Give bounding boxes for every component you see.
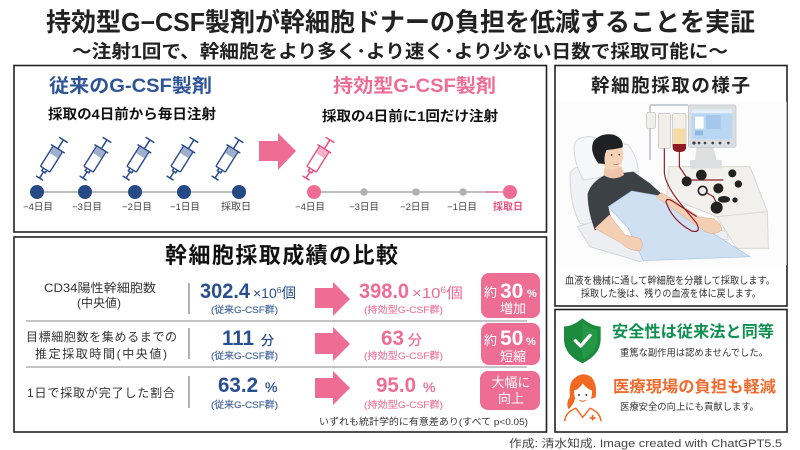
- row 2: collection time: 分: [408, 332, 422, 348]
- row 3: one-day completion rate: 95.0: [376, 374, 416, 397]
- icons: five blue syringes: [33, 136, 245, 182]
- arrow: conventional to long-acting: [259, 133, 296, 170]
- heading: workload: 医療現場の負担も軽減: [613, 377, 776, 396]
- row 2: collection time: (持効型G-CSF群): [364, 350, 443, 362]
- title: 持効型G−CSF製剤が幹細胞ドナーの負担を低減することを実証: [46, 8, 755, 37]
- panel: collection illustration: [555, 66, 787, 306]
- row 2: collection time: 63: [381, 327, 404, 350]
- row 2: collection time: (従来G-CSF群): [211, 350, 278, 362]
- torso: [588, 172, 662, 231]
- row 1: CD34 count: ×10: [253, 285, 277, 301]
- row 3: one-day completion rate: [27, 371, 540, 411]
- machine console: [667, 167, 768, 248]
- heading: safety: 安全性は従来法と同等: [612, 322, 774, 341]
- row 1: CD34 count: 6: [277, 285, 282, 295]
- text: safety detail: 重篤な副作用は認めませんでした。: [620, 347, 768, 359]
- row 1: CD34 count: ×10: [412, 285, 437, 302]
- row 1: CD34 count: 6: [441, 285, 446, 295]
- icon: nurse: [565, 374, 601, 421]
- icon: green shield: [564, 318, 601, 363]
- illustration: patient and apheresis machine: [557, 102, 787, 265]
- timeline: long-acting: −4日目: [295, 202, 325, 213]
- timeline: conventional: −3日目: [72, 202, 102, 213]
- row 3: one-day completion rate: 向上: [498, 391, 524, 406]
- row 1: CD34 count: 約: [484, 285, 497, 300]
- caption: 採取した後は、残りの血液を体に戻します。: [581, 287, 761, 300]
- panel: results comparison: [14, 237, 546, 432]
- row 2: collection time: 111: [222, 327, 254, 350]
- icon: pink syringe: [300, 136, 336, 182]
- heading: conventional G-CSF: 従来のG-CSF製剤: [49, 75, 212, 97]
- row 2: collection time: %: [526, 336, 536, 348]
- row 1: CD34 count: 個: [281, 285, 296, 302]
- timeline: long-acting: 採取日: [493, 200, 523, 213]
- head: [603, 167, 624, 178]
- timeline: conventional: [23, 185, 251, 213]
- row 3: one-day completion rate: (従来G-CSF群): [211, 399, 278, 411]
- caption: [565, 274, 775, 300]
- row 1: CD34 count: 増加: [500, 301, 526, 316]
- panel: dosing comparison: [14, 66, 546, 232]
- row 3: one-day completion rate: 1日で採取が完了した割合: [27, 385, 175, 400]
- row 3: one-day completion rate: %: [265, 379, 277, 395]
- bags: [647, 112, 655, 128]
- row 1: CD34 count: (従来G-CSF群): [211, 304, 278, 316]
- row 2: collection time: 約: [484, 333, 497, 348]
- row 1: CD34 count: (持効型G-CSF群): [364, 304, 443, 316]
- text: workload detail: 医療安全の向上にも貢献します。: [620, 401, 759, 413]
- timeline: long-acting: −1日目: [447, 202, 477, 213]
- chair: [570, 167, 617, 227]
- credit: 作成: 清水知成. Image created with ChatGPT5.5: [509, 436, 782, 450]
- timeline: long-acting: −2日目: [400, 202, 430, 213]
- footnote: significance: いずれも統計学的に有意差あり(すべて p<0.05): [319, 416, 528, 428]
- row 1: CD34 count: %: [527, 288, 537, 300]
- subtitle: 〜注射1回で、幹細胞をより多く･より速く･より少ない日数で採取可能に〜: [72, 41, 728, 62]
- row 1: CD34 count: 302.4: [200, 280, 250, 303]
- heading: results: 幹細胞採取成績の比較: [165, 243, 398, 268]
- row 3: one-day completion rate: (持効型G-CSF群): [364, 399, 443, 411]
- timeline: conventional: −1日目: [170, 202, 200, 213]
- timeline: long-acting: [295, 185, 523, 213]
- tubes: [664, 148, 698, 231]
- timeline: long-acting: −3日目: [349, 202, 379, 213]
- heading: long-acting G-CSF: 持効型G-CSF製剤: [333, 75, 496, 97]
- row 2: collection time: 50: [500, 327, 523, 350]
- knobs: [679, 152, 723, 207]
- row 2: collection time: 目標細胞数を集めるまでの: [26, 329, 177, 344]
- row 1: CD34 count: 個: [446, 285, 463, 302]
- row 1: CD34 count: 30: [500, 280, 523, 303]
- timeline: conventional: 採取日: [221, 200, 251, 213]
- panel: safety and workload: [555, 310, 787, 432]
- left arm: [595, 215, 642, 251]
- row 2: collection time: 推定採取時間(中央値): [35, 346, 167, 361]
- row 1: CD34 count: CD34陽性幹細胞数: [44, 280, 156, 295]
- text: conventional schedule: 採取の4日前から毎日注射: [48, 106, 216, 122]
- caption: 血液を機械に通して幹細胞を分離して採取します。: [565, 274, 775, 287]
- text: long-acting schedule: 採取の4日前に1回だけ注射: [322, 108, 498, 124]
- timeline: conventional: −4日目: [23, 202, 53, 213]
- blanket: [608, 191, 750, 261]
- row 2: collection time: 分: [261, 333, 274, 348]
- row 2: collection time: [26, 323, 540, 365]
- row 3: one-day completion rate: 大幅に: [491, 375, 531, 390]
- heading: collection scene: 幹細胞採取の様子: [591, 75, 750, 96]
- row 1: CD34 count: 398.0: [359, 280, 409, 303]
- row 2: collection time: 短縮: [500, 349, 526, 364]
- right arm: [656, 193, 722, 234]
- row 3: one-day completion rate: %: [423, 379, 435, 395]
- row 3: one-day completion rate: 63.2: [218, 374, 258, 397]
- row 1: CD34 count: (中央値): [77, 295, 121, 310]
- timeline: conventional: −2日目: [122, 202, 152, 213]
- row 1: CD34 count: [44, 273, 540, 318]
